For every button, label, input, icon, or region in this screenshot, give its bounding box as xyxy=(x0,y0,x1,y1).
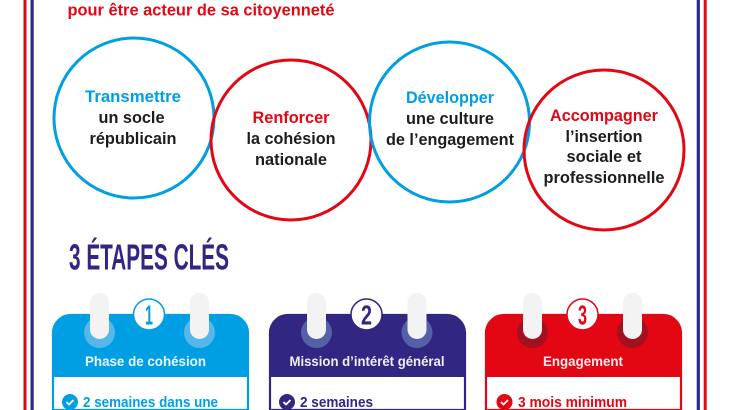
circle: Développer: de l’engagement xyxy=(386,131,514,149)
badge 1 xyxy=(134,299,164,330)
circle: Transmettre: un socle xyxy=(98,109,164,127)
circle: Renforcer: nationale xyxy=(255,151,327,169)
check icon xyxy=(279,394,295,410)
badge 3: 3 xyxy=(578,300,587,330)
check icon xyxy=(496,394,512,410)
circle: Accompagner: professionnelle xyxy=(544,169,664,187)
badge 2 xyxy=(351,299,382,330)
right tricolour border xyxy=(697,0,707,410)
circle: Transmettre: Transmettre xyxy=(85,87,181,106)
card 1: Phase de cohésion: Phase de cohésion xyxy=(85,353,206,369)
circle: Renforcer: la cohésion xyxy=(246,130,336,148)
circle: Renforcer xyxy=(211,60,371,220)
badge 3 xyxy=(567,299,598,330)
circle: Accompagner: l’insertion xyxy=(566,128,642,146)
card 3: Engagement xyxy=(485,293,681,410)
card 2: Mission d’intérêt général xyxy=(269,293,465,410)
card 3: Engagement: Engagement xyxy=(543,353,623,369)
heading: 3 étapes clés: 3 ÉTAPES CLÉS xyxy=(69,236,229,278)
circle: Développer: Développer xyxy=(406,88,494,107)
circle: Accompagner xyxy=(524,70,684,230)
circle: Développer: une culture xyxy=(406,110,494,128)
subtitle: pour être acteur de sa citoyenneté xyxy=(68,0,334,20)
badge 1: 1 xyxy=(145,300,153,330)
card 2: Mission d’intérêt général: Mission d’intérêt général xyxy=(290,353,444,369)
badge 2: 2 xyxy=(361,300,372,330)
circle: Développer xyxy=(370,42,530,202)
circle: Accompagner: sociale et xyxy=(566,148,642,166)
check icon xyxy=(62,394,78,410)
circle: Transmettre xyxy=(54,38,214,198)
circle: Renforcer: Renforcer xyxy=(252,108,330,127)
circle: Transmettre: républicain xyxy=(90,130,176,148)
left tricolour border xyxy=(24,0,34,410)
circle: Accompagner: Accompagner xyxy=(550,106,658,125)
card 1: Phase de cohésion xyxy=(52,293,248,410)
